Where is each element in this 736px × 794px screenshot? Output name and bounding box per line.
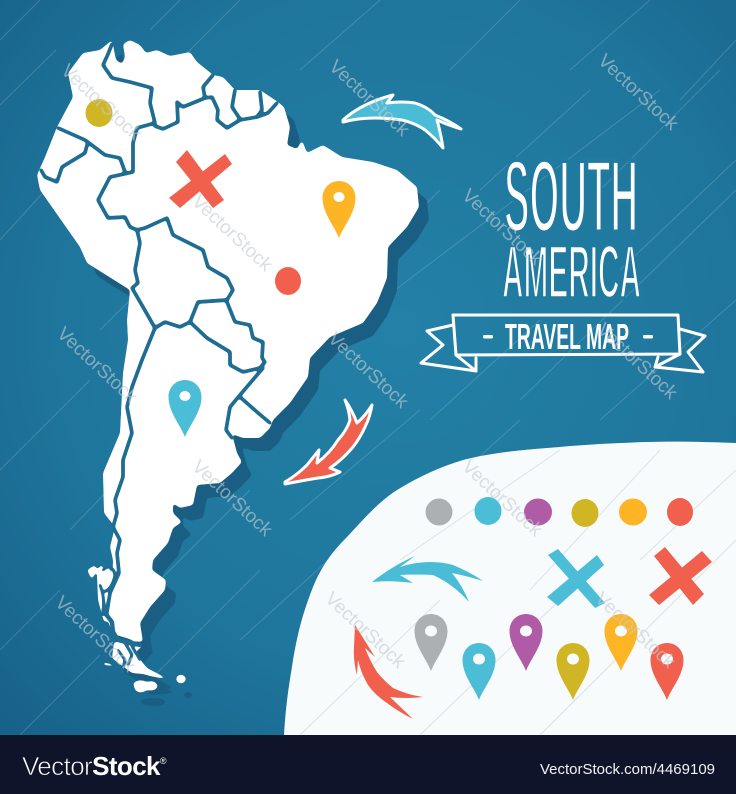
palette: olive pin	[556, 643, 590, 700]
palette: cyan arrow	[372, 556, 483, 602]
arrow: cyan top	[343, 95, 461, 148]
footer image id: VectorStock.com/4469109	[540, 762, 715, 778]
watermarks: VectorStock	[321, 588, 409, 673]
map land	[37, 40, 419, 692]
title	[502, 139, 641, 315]
ribbon dash left	[483, 335, 493, 338]
ribbon text: TRAVEL MAP	[505, 316, 629, 357]
palette: cyan pin	[462, 643, 496, 700]
country borders	[41, 44, 277, 672]
map shadow	[47, 53, 429, 706]
ribbon dash right	[643, 335, 653, 338]
palette: red arrow	[354, 625, 423, 719]
watermarks: VectorStock	[458, 456, 546, 541]
watermarks: VectorStock	[594, 50, 682, 135]
ribbon banner	[421, 315, 705, 372]
palette: cyan cross	[547, 549, 605, 608]
watermarks: VectorStock	[324, 328, 412, 413]
marker: red dot	[275, 267, 301, 295]
palette: purple pin	[510, 614, 542, 671]
palette: dots	[426, 497, 693, 527]
palette: red pin	[650, 643, 684, 700]
watermarks: VectorStock	[593, 319, 681, 404]
map markers	[86, 99, 356, 437]
footer logo: ®	[160, 756, 167, 766]
watermarks: VectorStock	[51, 592, 139, 677]
watermarks: VectorStock	[591, 588, 679, 673]
palette: grey pin	[414, 614, 448, 671]
marker: amber pin	[322, 181, 356, 238]
watermarks: VectorStock	[188, 191, 276, 276]
ribbon outline	[421, 315, 705, 372]
watermarks: VectorStock	[53, 323, 141, 408]
palette: red cross	[649, 547, 712, 605]
watermarks: VectorStock	[188, 456, 276, 541]
footer bar	[0, 735, 736, 794]
watermarks: VectorStock	[325, 56, 413, 141]
arrow: red lower	[285, 400, 372, 484]
footer logo: VectorStock	[22, 751, 160, 781]
watermarks	[51, 50, 682, 677]
palette: amber pin	[604, 614, 638, 671]
panel: icon palette	[284, 442, 736, 736]
marker: olive dot	[86, 99, 112, 127]
watermarks: VectorStock	[57, 60, 145, 145]
marker: cyan pin	[168, 380, 202, 437]
marker: red cross	[169, 150, 232, 208]
watermarks: VectorStock	[458, 185, 546, 270]
palette background	[284, 442, 736, 736]
